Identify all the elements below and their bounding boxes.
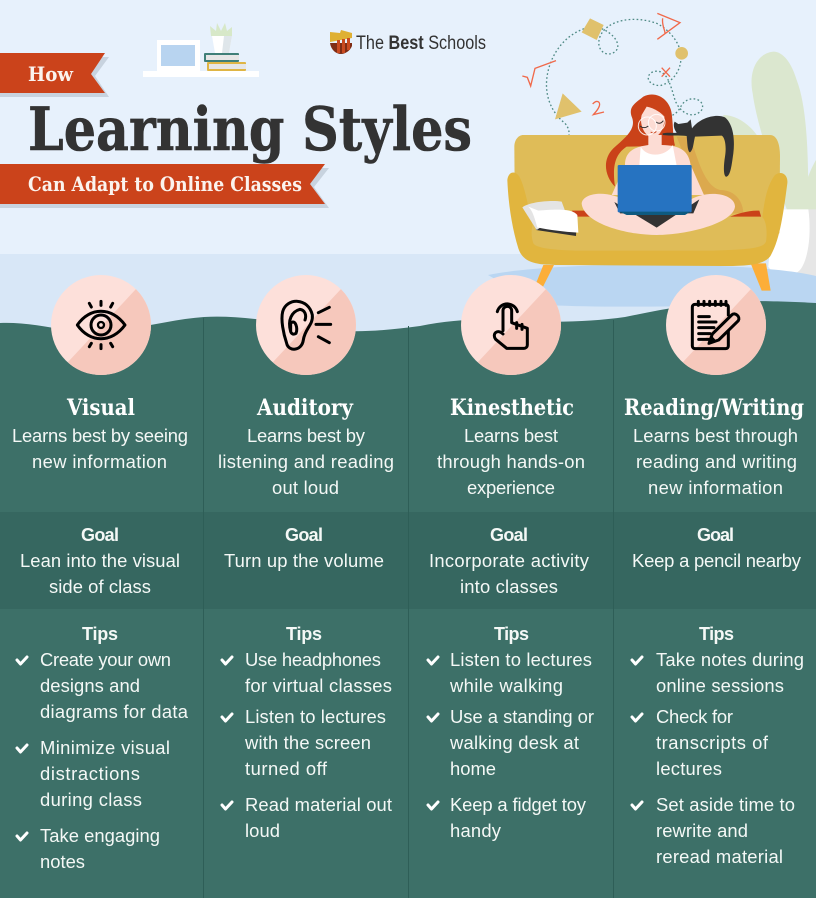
tips: Visual: Take engaging: [40, 825, 160, 846]
logo: The Best Schools: [330, 30, 486, 54]
ribbon: How: [0, 53, 109, 97]
tips: Reading/Writing: Take notes during: [656, 649, 804, 670]
description: Visual: new information: [32, 451, 167, 472]
illustration: woman with laptop: [582, 95, 735, 235]
tips: Auditory: for virtual classes: [245, 675, 392, 696]
goal: Visual: Lean into the visual: [20, 550, 180, 571]
goal: Kinesthetic: Goal: [490, 525, 528, 545]
tips: Reading/Writing: reread material: [656, 846, 783, 867]
goal: Visual: side of class: [49, 576, 151, 597]
description: Kinesthetic: [437, 425, 585, 498]
tips: Visual: notes: [40, 851, 85, 872]
illustration: dotted path with math symbols: [522, 13, 703, 194]
heading: Auditory: Auditory: [256, 395, 354, 421]
illustration: shelf with frame, books and plant: [143, 23, 259, 77]
description: Auditory: Learns best by: [247, 425, 366, 446]
ribbon: How: How: [28, 62, 74, 86]
description: Auditory: listening and reading: [218, 451, 394, 472]
tips: Kinesthetic: handy: [450, 820, 502, 841]
tips: Visual: Create your own: [40, 649, 171, 670]
tips: Auditory: Use headphones: [245, 649, 381, 670]
description: Kinesthetic: through hands-on: [437, 451, 585, 472]
goal: Visual: Goal: [81, 525, 119, 545]
illustration: plant and pot: [723, 52, 816, 287]
tips: Reading/Writing: rewrite and: [656, 820, 748, 841]
goal: Kinesthetic: [429, 525, 590, 597]
logo: The Best Schools: The Best Schools: [356, 33, 486, 54]
tips: Reading/Writing: Set aside time to: [656, 794, 795, 815]
icon: notepad and pencil: [666, 275, 766, 375]
description: Reading/Writing: [633, 425, 798, 498]
goal: Auditory: Goal: [285, 525, 323, 545]
tips: Reading/Writing: lectures: [656, 758, 722, 779]
illustration: open book: [522, 201, 578, 236]
tips: Kinesthetic: Keep a fidget toy: [450, 794, 587, 815]
description: Auditory: out loud: [272, 477, 339, 498]
description: Reading/Writing: reading and writing: [636, 451, 797, 472]
tips: Auditory: [222, 624, 392, 841]
tips: Auditory: Read material out: [245, 794, 392, 815]
green wave background: [0, 301, 816, 898]
goal: Auditory: Turn up the volume: [224, 550, 384, 571]
panel: Auditory: [218, 275, 394, 841]
goal: Reading/Writing: Goal: [697, 525, 734, 545]
tips: Kinesthetic: Listen to lectures: [450, 649, 592, 670]
tips: Kinesthetic: while walking: [449, 675, 563, 696]
icon: ear: [256, 275, 356, 375]
ribbon: Can Adapt to Online Classes: [0, 164, 329, 208]
tips: Reading/Writing: Check for: [656, 706, 733, 727]
tips: Auditory: Listen to lectures: [245, 706, 386, 727]
description: Visual: [12, 425, 188, 472]
title: Learning Styles: [28, 95, 472, 165]
tips: Auditory: with the screen: [244, 732, 371, 753]
panel: Reading/Writing: [624, 275, 804, 867]
illustration: sofa: [507, 135, 787, 291]
tips: Auditory: turned off: [245, 758, 328, 779]
panel: Kinesthetic: [428, 275, 594, 841]
description: Auditory: [218, 425, 394, 498]
tips: Reading/Writing: [632, 624, 804, 867]
tips: Kinesthetic: Tips: [494, 624, 529, 644]
tips: Kinesthetic: [428, 624, 594, 841]
icon: eye: [51, 275, 151, 375]
tips: Visual: [17, 624, 189, 872]
goal: Reading/Writing: Keep a pencil nearby: [632, 550, 802, 571]
icon: pointing hand: [461, 275, 561, 375]
heading: Kinesthetic: Kinesthetic: [450, 395, 574, 421]
tips: Visual: diagrams for data: [40, 701, 189, 722]
tips: Auditory: loud: [245, 820, 280, 841]
tips: Reading/Writing: online sessions: [656, 675, 784, 696]
tips: Visual: Tips: [82, 624, 118, 644]
heading: Visual: Visual: [66, 395, 135, 421]
description: Reading/Writing: Learns best through: [633, 425, 798, 446]
description: Kinesthetic: experience: [467, 477, 555, 498]
tips: Reading/Writing: transcripts of: [656, 732, 769, 753]
tips: Kinesthetic: Use a standing or: [450, 706, 594, 727]
illustration: rug: [488, 264, 816, 307]
tips: Visual: distractions: [40, 763, 140, 784]
description: Kinesthetic: Learns best: [464, 425, 558, 446]
tips: Kinesthetic: walking desk at: [449, 732, 579, 753]
tips: Kinesthetic: home: [450, 758, 496, 779]
goal: Visual: [20, 525, 180, 597]
tips: Reading/Writing: Tips: [699, 624, 734, 644]
ribbon: Can Adapt to Online Classes: Can Adapt to Online Classes: [28, 172, 302, 196]
description: Visual: Learns best by seeing: [12, 425, 188, 446]
goal: Kinesthetic: into classes: [460, 576, 558, 597]
goal: Reading/Writing: [632, 525, 802, 571]
goal band: [0, 512, 816, 609]
goal: Kinesthetic: Incorporate activity: [429, 550, 590, 571]
illustration: black cat: [663, 116, 734, 177]
panel: Visual: [12, 275, 189, 872]
tips: Auditory: Tips: [286, 624, 322, 644]
tips: Visual: designs and: [40, 675, 140, 696]
tips: Visual: during class: [40, 789, 142, 810]
goal: Auditory: [224, 525, 384, 571]
tips: Visual: Minimize visual: [40, 737, 170, 758]
description: Reading/Writing: new information: [648, 477, 783, 498]
